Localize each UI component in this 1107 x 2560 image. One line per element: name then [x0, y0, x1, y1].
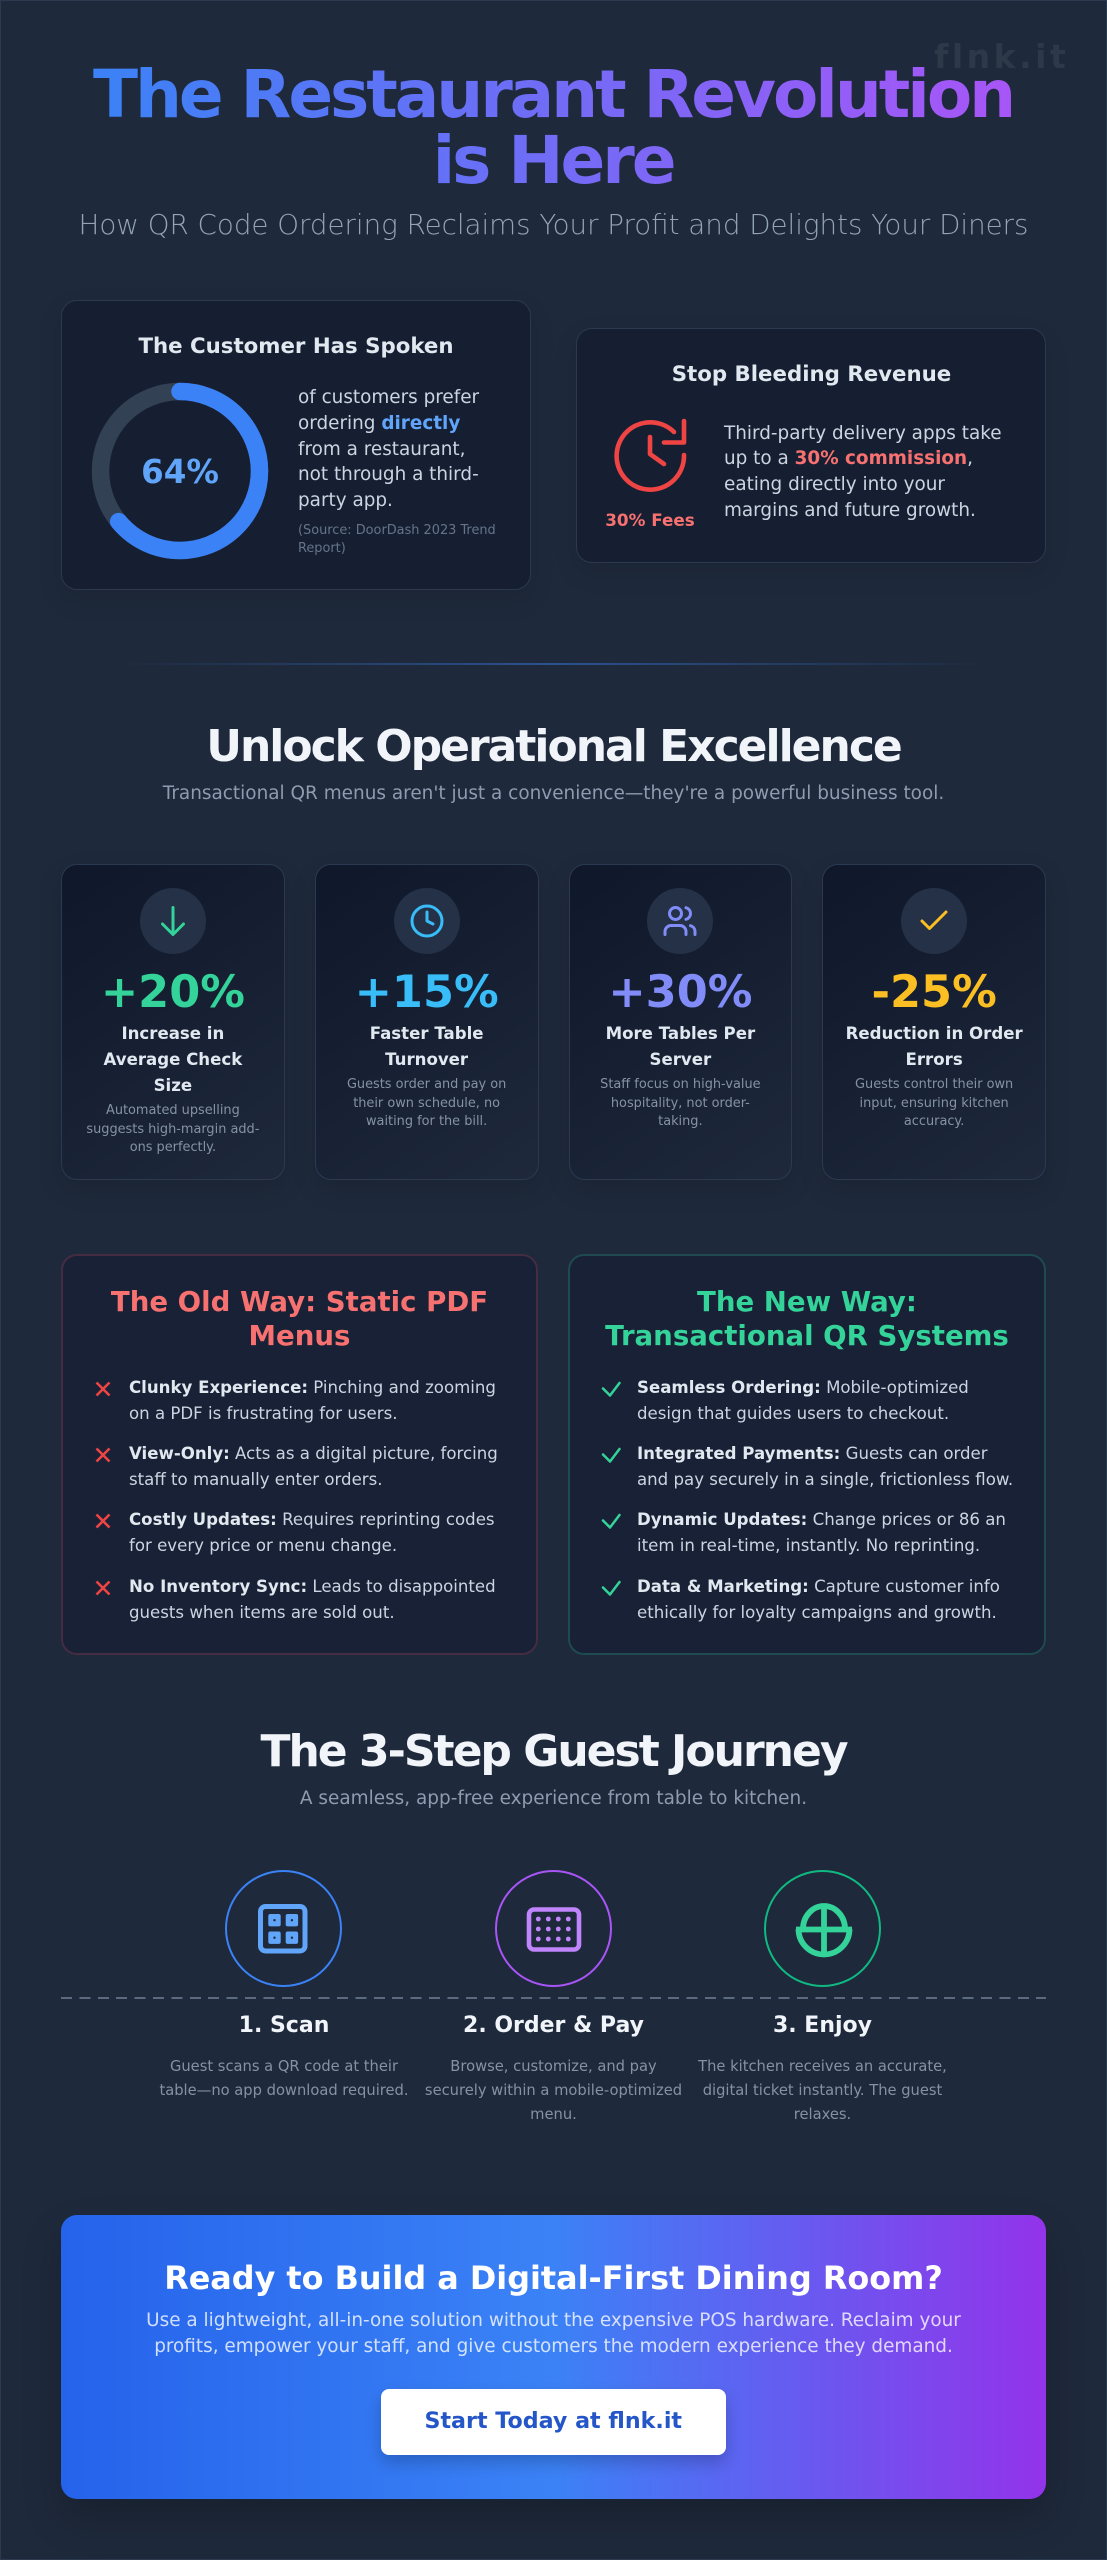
icon: clock with arrow — [614, 418, 686, 492]
step 3 description: The kitchen receives an accurate, — [698, 2058, 947, 2075]
heading: old way — [111, 1285, 488, 1352]
list item: no inventory sync: No Inventory Sync: Leads to disappointed — [129, 1576, 496, 1596]
stat title — [606, 1024, 756, 1069]
panel: stop bleeding revenue — [576, 328, 1046, 563]
stat description: input, ensuring kitchen — [860, 1096, 1009, 1111]
list item: costly updates: Costly Updates: Requires reprinting codes — [129, 1510, 495, 1529]
step 3 label: 3. Enjoy — [773, 2013, 872, 2038]
stat description: accuracy. — [904, 1114, 964, 1129]
divider — [110, 663, 997, 665]
text: call to action: profits, empower your staff, and give customers the modern experience they demand. — [154, 2336, 953, 2357]
heading: customer panel: The Customer Has Spoken — [138, 334, 454, 359]
step 2 description: securely within a mobile-optimized — [425, 2082, 682, 2099]
stat title — [370, 1024, 484, 1069]
stat card: +30% — [568, 864, 792, 1180]
list item: integrated payments — [602, 1444, 1013, 1489]
text: commission explanation — [724, 422, 1002, 521]
stat title: More Tables Per — [606, 1024, 755, 1043]
list item: dynamic updates: item in real-time, instantly. No reprinting. — [637, 1536, 980, 1555]
stat title — [104, 1024, 242, 1095]
list item: seamless ordering: Seamless Ordering: Mobile-optimized — [637, 1378, 969, 1397]
section subtitle: journey: A seamless, app-free experience from table to kitchen. — [300, 1788, 807, 1809]
dashed connector line — [61, 1997, 1046, 1999]
step 1 description: Guest scans a QR code at their — [170, 2058, 398, 2075]
step 1 description — [159, 2058, 409, 2099]
title: The Restaurant Revolution — [93, 56, 1013, 133]
list item: seamless ordering — [602, 1378, 969, 1423]
button: start today — [381, 2389, 726, 2455]
heading: call to action: Ready to Build a Digital-First Dining Room? — [164, 2259, 943, 2297]
text: customer preference — [298, 387, 480, 511]
button: start today: Start Today at flnk.it — [424, 2408, 682, 2434]
step 2 description — [425, 2058, 682, 2123]
text: commission explanation: Third-party delivery apps take — [724, 422, 1002, 444]
list item: costly updates: for every price or menu change. — [129, 1536, 397, 1555]
text: commission explanation: margins and future growth. — [724, 500, 976, 521]
heading: new way: Transactional QR Systems — [605, 1319, 1009, 1352]
step 2 description: Browse, customize, and pay — [450, 2058, 657, 2075]
stat card: -25% — [822, 864, 1046, 1180]
title: is Here — [433, 122, 673, 199]
list item: dynamic updates: Dynamic Updates: Change prices or 86 an — [637, 1510, 1006, 1529]
text: customer preference: of customers prefer — [298, 387, 479, 408]
stat title: Size — [154, 1076, 192, 1095]
heading: revenue panel: Stop Bleeding Revenue — [672, 362, 951, 387]
stat value: +20% — [101, 966, 245, 1018]
stat description: Automated upselling — [106, 1103, 240, 1118]
step 3 description: digital ticket instantly. The guest — [703, 2082, 942, 2099]
stat value: +30% — [608, 966, 752, 1018]
stat description: ons perfectly. — [130, 1140, 216, 1155]
text: customer preference: party app. — [298, 490, 393, 511]
heading: 3-step guest journey: The 3-Step Guest Journey — [260, 1726, 847, 1777]
stat description — [600, 1077, 761, 1129]
text: customer preference: not through a third- — [298, 464, 479, 485]
list item: clunky experience: on a PDF is frustrating for users. — [129, 1404, 398, 1423]
list item: no inventory sync: guests when items are sold out. — [129, 1602, 395, 1622]
stat description: Guests order and pay on — [347, 1077, 506, 1092]
icon: menu grid — [495, 1870, 612, 1987]
heading: old way: The Old Way: Static PDF — [111, 1285, 488, 1318]
stat description — [86, 1103, 259, 1155]
step 3 description: relaxes. — [794, 2106, 851, 2123]
list item: integrated payments: Integrated Payments: Guests can order — [637, 1444, 988, 1463]
stat description: waiting for the bill. — [366, 1114, 487, 1129]
step 3 description — [698, 2058, 947, 2123]
stat title: Increase in — [121, 1024, 224, 1043]
list item: clunky experience: Clunky Experience: Pinching and zooming — [129, 1378, 496, 1397]
icon: check — [901, 888, 967, 954]
heading: old way: Menus — [249, 1319, 350, 1352]
watermark: flnk.it: flnk.it — [934, 37, 1069, 76]
text: call to action — [146, 2310, 961, 2357]
step 2 description: menu. — [530, 2106, 577, 2123]
title — [93, 62, 1013, 194]
list item: view-only: staff to manually enter orders. — [129, 1470, 383, 1489]
subtitle: How QR Code Ordering Reclaims Your Profit and Delights Your Diners — [79, 208, 1028, 241]
list item: seamless ordering: design that guides users to checkout. — [637, 1404, 949, 1423]
list item: view-only: View-Only: Acts as a digital picture, forcing — [129, 1444, 498, 1463]
list item: data and marketing — [602, 1576, 1000, 1622]
text: commission explanation: eating directly into your — [724, 474, 945, 495]
stat title: Average Check — [104, 1050, 242, 1069]
source note: (Source: DoorDash 2023 Trend — [298, 523, 496, 538]
source note — [298, 523, 496, 556]
stat description: suggests high-margin add- — [86, 1122, 259, 1137]
panel: the new way — [568, 1254, 1046, 1655]
stat card: +20% — [61, 864, 285, 1180]
list item: clunky experience — [96, 1378, 496, 1423]
list item: view-only — [96, 1444, 498, 1489]
list item: data and marketing: ethically for loyalty campaigns and growth. — [637, 1602, 997, 1622]
stat description: hospitality, not order- — [611, 1096, 750, 1111]
label: 30% fees: 30% Fees — [605, 510, 695, 530]
donut chart: 64% — [92, 382, 268, 560]
list item: costly updates — [96, 1510, 495, 1555]
icon: users — [647, 888, 713, 954]
stat value: -25% — [872, 966, 997, 1018]
step 1 label: 1. Scan — [239, 2013, 329, 2038]
step 1 description: table—no app download required. — [159, 2082, 409, 2099]
list item: dynamic updates — [602, 1510, 1006, 1555]
stat description — [347, 1077, 506, 1129]
stat description: their own schedule, no — [353, 1096, 500, 1111]
stat title: Errors — [906, 1050, 963, 1069]
section subtitle: operations: Transactional QR menus aren't just a convenience—they're a powerful business tool. — [163, 783, 944, 804]
stat description: Staff focus on high-value — [600, 1077, 761, 1092]
stat description: taking. — [658, 1114, 703, 1129]
text: commission explanation: up to a 30% commission, — [724, 448, 973, 469]
step 3: enjoy — [764, 1870, 881, 1987]
step 2 label: 2. Order & Pay — [463, 2013, 644, 2038]
list item: integrated payments: and pay securely in a single, frictionless flow. — [637, 1470, 1013, 1489]
stat title: Reduction in Order — [846, 1024, 1023, 1043]
icon: bowl — [764, 1870, 881, 1987]
icon: clock — [394, 888, 460, 954]
stat title — [846, 1024, 1023, 1069]
source note: Report) — [298, 541, 346, 556]
heading: new way — [605, 1285, 1009, 1352]
list item: no inventory sync — [96, 1576, 496, 1622]
heading: new way: The New Way: — [697, 1285, 917, 1318]
stat card: +15% — [315, 864, 538, 1180]
text: call to action: Use a lightweight, all-in-one solution without the expensive POS hardware. Reclaim your — [146, 2310, 961, 2331]
text: customer preference: from a restaurant, — [298, 438, 466, 460]
icon: qr scan — [225, 1870, 342, 1987]
panel: the old way — [61, 1254, 538, 1655]
stat title: Server — [650, 1050, 711, 1069]
icon: arrow down — [140, 888, 206, 954]
step 1: scan — [225, 1870, 342, 1987]
step 2: order and pay — [495, 1870, 612, 1987]
stat value: +15% — [355, 966, 499, 1018]
stat title: Faster Table — [370, 1024, 484, 1043]
donut chart: 64%: 64% — [141, 453, 219, 491]
list item: data and marketing: Data & Marketing: Capture customer info — [637, 1576, 1000, 1596]
stat description: Guests control their own — [855, 1077, 1013, 1092]
text: customer preference: ordering directly — [298, 413, 460, 434]
stat description — [855, 1077, 1013, 1129]
heading: unlock operational excellence: Unlock Operational Excellence — [206, 721, 901, 772]
panel: call to action — [61, 2215, 1046, 2499]
stat title: Turnover — [385, 1050, 468, 1069]
panel: the customer has spoken — [61, 300, 531, 590]
